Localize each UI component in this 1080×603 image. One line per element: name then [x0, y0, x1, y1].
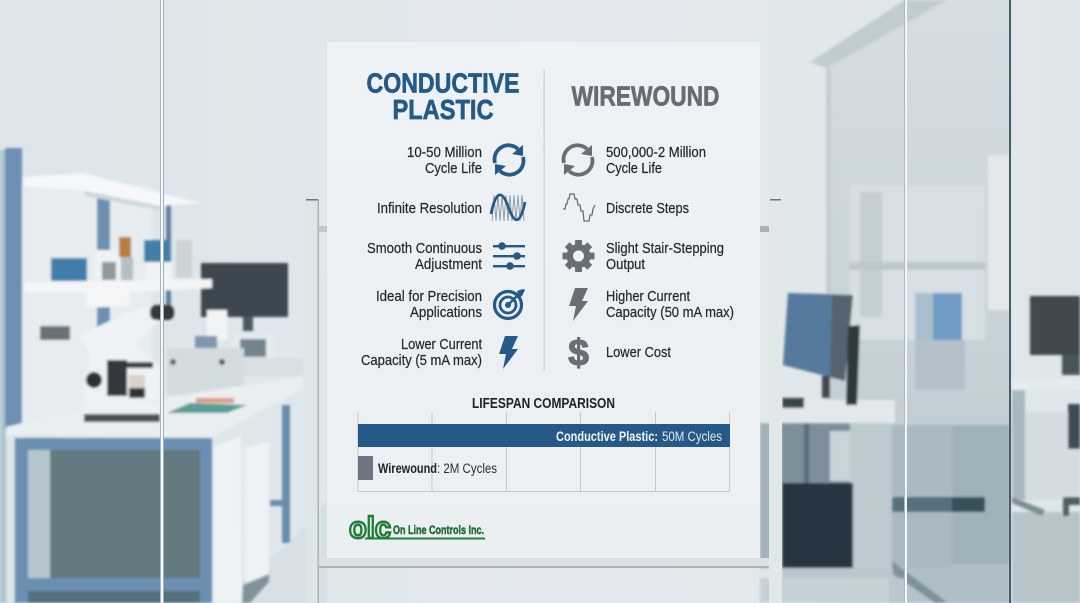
left column feature text: Ideal for Precision — [376, 289, 482, 305]
left column feature text: Lower Current — [401, 337, 482, 353]
heading: conductive plastic — [366, 68, 520, 125]
icon: gray cycle arrows — [563, 145, 593, 175]
logo: On Line Controls Inc.: On Line Controls Inc. — [393, 523, 484, 537]
left column feature text: Smooth Continuous — [367, 241, 482, 257]
heading: conductive plastic: PLASTIC — [392, 94, 494, 125]
bar chart: lifespan comparison — [358, 396, 730, 492]
right column feature text: Lower Cost — [606, 345, 671, 361]
icon: sliders — [493, 242, 525, 270]
icon: blue cycle arrows — [494, 145, 524, 175]
logo: On Line Controls Inc.: olc — [349, 510, 391, 545]
center divider — [544, 70, 545, 370]
chart grid — [358, 412, 730, 492]
right column feature text: Output — [606, 257, 645, 273]
chart title: LIFESPAN COMPARISON — [472, 396, 615, 412]
right column feature text: Slight Stair-Stepping — [606, 241, 724, 257]
right column feature text: Discrete Steps — [606, 201, 689, 217]
left column feature text: Cycle Life — [425, 161, 482, 177]
left column feature text: Capacity (5 mA max) — [361, 353, 482, 369]
icon: gear — [562, 240, 594, 272]
board stand — [305, 199, 782, 603]
glass edge lines — [160, 0, 1011, 603]
left column feature text: 10-50 Million — [407, 145, 482, 161]
icon: smooth wave — [491, 195, 525, 221]
bar: conductive plastic — [358, 424, 730, 447]
left column feature text: Adjustment — [415, 257, 482, 273]
logo: On Line Controls Inc. — [349, 510, 485, 545]
left column feature text — [361, 145, 482, 369]
right column feature text: Capacity (50 mA max) — [606, 305, 734, 321]
heading: conductive plastic: CONDUCTIVE — [366, 68, 520, 98]
bar: wirewound: Wirewound — [378, 461, 437, 476]
left column feature text: Infinite Resolution — [377, 201, 482, 217]
panel: comparison board — [327, 42, 760, 558]
right column feature text: Cycle Life — [606, 161, 662, 177]
right column feature text — [606, 145, 734, 361]
heading: wirewound: WIREWOUND — [572, 80, 720, 112]
far right desk — [1012, 296, 1080, 603]
bar: wirewound — [358, 456, 497, 480]
right column feature text: 500,000-2 Million — [606, 145, 706, 161]
icon: blue lightning bolt — [499, 336, 518, 369]
icon: target with arrow — [494, 289, 525, 318]
right glass room — [760, 0, 1010, 603]
bar: conductive plastic: 50M Cycles — [662, 429, 722, 444]
icon: stepped wave — [563, 194, 595, 221]
right column feature text: Higher Current — [606, 289, 690, 305]
icon: gray lightning bolt — [569, 288, 588, 321]
bar: conductive plastic: Conductive Plastic: — [556, 429, 658, 444]
bench top and frame — [6, 376, 327, 603]
left lab bench with shelves — [0, 148, 304, 603]
bar: wirewound: : 2M Cycles — [437, 461, 497, 476]
icon: dollar sign: $ — [568, 332, 589, 373]
left column feature text: Applications — [410, 305, 482, 321]
